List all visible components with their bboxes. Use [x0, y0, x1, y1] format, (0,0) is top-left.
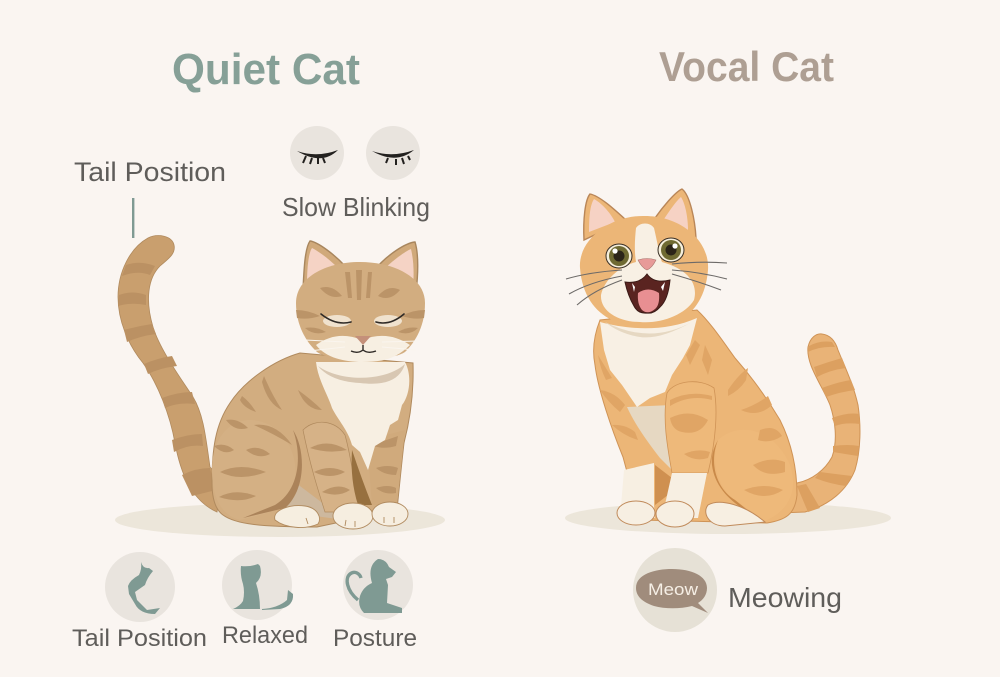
quiet cat haunch [212, 420, 296, 520]
label: Meowing: Meowing [728, 582, 842, 613]
vocal cat leg stripes [670, 394, 712, 459]
label: Posture: Posture [333, 625, 417, 652]
vocal cat head [580, 216, 708, 324]
vocal cat belly [627, 405, 672, 470]
title: Vocal Cat: Vocal Cat [659, 43, 834, 90]
vocal cat collar shadow [605, 322, 692, 337]
label: Slow Blinking: Slow Blinking [282, 192, 430, 222]
vocal cat open mouth [625, 274, 670, 313]
quiet cat tail [118, 236, 222, 512]
title: Quiet Cat: Quiet Cat [172, 45, 360, 94]
label: Tail Position: Tail Position [74, 157, 226, 187]
quiet cat front leg [303, 422, 360, 512]
illustration: quiet tabby cat [118, 236, 425, 529]
quiet cat whiskers [300, 340, 418, 352]
label: bottom Tail Position: Tail Position [72, 625, 207, 652]
vocal cat eyes [606, 238, 684, 268]
vocal cat whiskers [566, 262, 727, 305]
icon: relaxed cat [222, 550, 293, 620]
vocal cat paws [617, 501, 765, 527]
vocal cat white legs [620, 463, 655, 518]
vocal cat ears [584, 194, 626, 240]
label: Relaxed: Relaxed [222, 622, 308, 649]
vocal cat body stripes [598, 340, 785, 496]
icon: tail position [105, 552, 175, 622]
quiet cat collar shadow [318, 364, 405, 384]
quiet cat muzzle [316, 336, 410, 362]
icon: meow speech bubble [633, 548, 717, 632]
quiet cat body [212, 353, 413, 527]
quiet cat belly shadow [285, 480, 345, 520]
icon: meow speech bubble: Meow [648, 580, 699, 599]
quiet cat leg stripes [310, 436, 398, 495]
shadow: quiet cat [115, 503, 445, 537]
quiet cat second leg [367, 430, 405, 505]
vocal cat body [594, 310, 797, 523]
illustration: vocal orange cat [566, 189, 860, 527]
quiet cat nose and mouth [351, 336, 376, 352]
quiet cat paws [275, 502, 408, 529]
quiet cat ears [303, 241, 345, 290]
quiet cat body stripes [214, 376, 330, 500]
quiet cat white chest [316, 362, 409, 470]
quiet cat tail stripes [118, 263, 216, 496]
shadow: vocal cat [565, 502, 891, 534]
vocal cat nose [638, 258, 656, 270]
tail position pointer line [132, 198, 134, 238]
icon: posture cat [343, 550, 413, 620]
vocal cat tail [780, 334, 860, 513]
quiet cat head [296, 262, 425, 360]
vocal cat white chest [600, 318, 697, 407]
vocal cat tail stripes [797, 342, 860, 512]
vocal cat haunch [715, 430, 793, 521]
quiet cat head stripes [296, 270, 425, 333]
quiet cat closed eyes [321, 314, 404, 327]
vocal cat front leg [665, 382, 716, 473]
icon: slow blinking eyes [290, 126, 420, 180]
vocal cat dark gap [655, 465, 672, 505]
vocal cat face white [601, 224, 695, 322]
